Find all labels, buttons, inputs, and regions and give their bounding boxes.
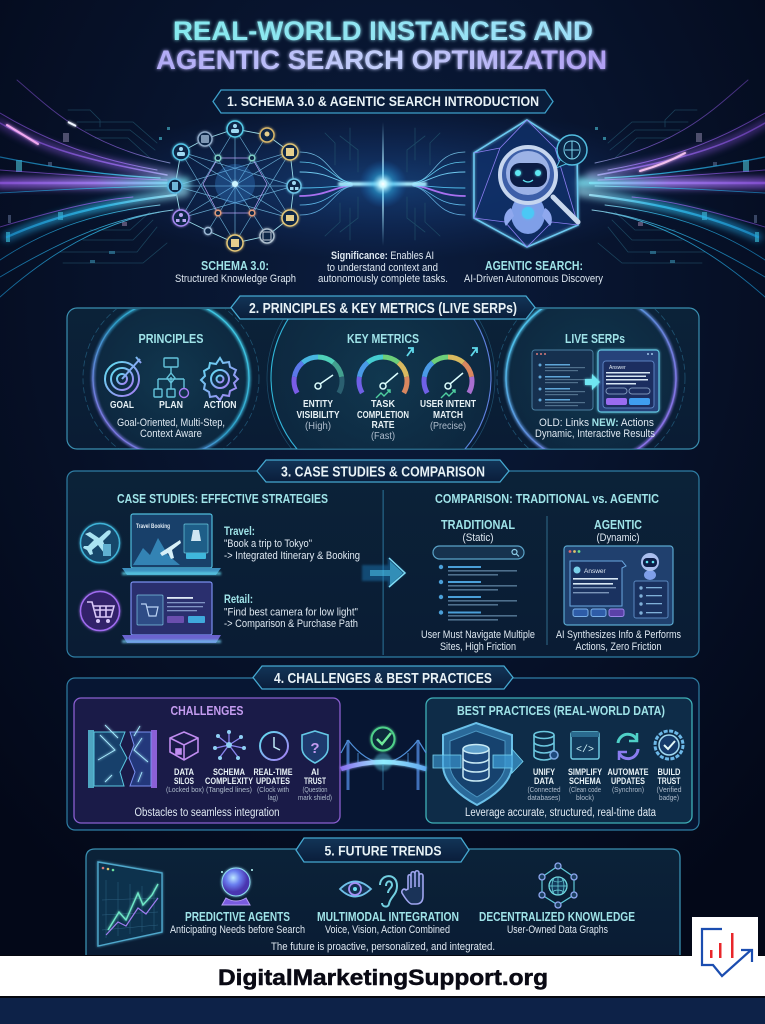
icon: data shield with arrow [433, 723, 523, 805]
best practice labels: databases) [528, 793, 561, 802]
text: decentralized knowledge: User-Owned Data Graphs [507, 924, 608, 936]
text: significance: autonomously complete tasks. [318, 273, 448, 285]
best practice labels: (Synchron) [612, 785, 644, 794]
gauge: task completion rate [359, 348, 413, 398]
traditional column: User Must Navigate Multiple [421, 629, 535, 641]
text: agentic search caption: AGENTIC SEARCH: [485, 259, 583, 273]
text: significance: Significance: Enables AI [331, 250, 434, 262]
section 4 heading pill [253, 666, 513, 689]
live serps column [532, 331, 659, 440]
challenge labels: COMPLEXITY [205, 776, 254, 787]
metric labels [296, 399, 476, 442]
metric labels: TASK [371, 399, 396, 410]
best practices box: Leverage accurate, structured, real-time data [465, 807, 656, 819]
text: significance [318, 250, 448, 285]
agentic column: Actions, Zero Friction [576, 641, 662, 653]
icon: travel booking laptop: Travel Booking [136, 524, 170, 530]
section 1 heading pill: 1. SCHEMA 3.0 & AGENTIC SEARCH INTRODUCTION [227, 94, 539, 109]
icon: unify database [534, 732, 558, 760]
challenges box: CHALLENGES [170, 703, 244, 718]
text: predictive agents [170, 909, 305, 936]
panel: case studies and comparison [67, 460, 699, 657]
best practice labels: (Clean code [569, 785, 601, 794]
section 1 heading pill [213, 90, 553, 113]
challenge labels: REAL-TIME [254, 767, 292, 778]
text: retail case: Retail: [224, 594, 253, 606]
best practice labels: UNIFY [533, 767, 556, 778]
agentic column: (Dynamic) [596, 532, 640, 544]
best practice labels: badge) [659, 793, 679, 802]
best practice labels: AUTOMATE [608, 767, 648, 778]
text: predictive agents: PREDICTIVE AGENTS [185, 909, 290, 924]
principles column: ACTION [204, 400, 236, 411]
icon: tangled schema nodes [213, 730, 246, 760]
best practices box: BEST PRACTICES (REAL-WORLD DATA) [457, 703, 665, 718]
principles column: Context Aware [140, 428, 202, 440]
section 2 heading pill: 2. PRINCIPLES & KEY METRICS (LIVE SERPs) [249, 300, 517, 317]
metric labels: MATCH [433, 410, 463, 421]
icon: goal target [105, 357, 141, 396]
result list [439, 565, 517, 621]
section 5 heading pill [296, 838, 469, 862]
text: multimodal integration [317, 909, 459, 936]
icon: trust badge [655, 731, 683, 759]
agentic column [556, 517, 681, 653]
challenge labels: AI [311, 767, 319, 778]
icon: bridge with check [341, 728, 426, 790]
icon: decentralized network globe [539, 863, 577, 908]
challenge labels: (Clock with [257, 785, 289, 794]
icon: retail cart circle [80, 592, 120, 630]
icon: question shield: ? [310, 740, 320, 757]
title [156, 16, 607, 75]
traditional column: Sites, High Friction [440, 641, 516, 653]
challenge labels: TRUST [304, 776, 326, 787]
icon: small robot [641, 553, 659, 580]
metric labels: RATE [372, 420, 395, 431]
text: multimodal integration: Voice, Vision, Action Combined [325, 924, 450, 936]
metric labels: VISIBILITY [296, 410, 340, 421]
arrow: case studies to comparison [362, 557, 406, 588]
gauge: entity visibility [294, 357, 342, 393]
best practice labels: TRUST [658, 776, 681, 787]
best practice labels: (Verified [656, 785, 682, 794]
challenges box: Obstacles to seamless integration [134, 807, 280, 819]
traditional column [421, 517, 535, 653]
text: decentralized knowledge: DECENTRALIZED KNOWLEDGE [479, 909, 635, 924]
principles column: PRINCIPLES [138, 331, 204, 346]
best practice labels: (Connected [528, 785, 560, 794]
text: decentralized knowledge [479, 909, 635, 936]
metric labels: (Fast) [371, 431, 395, 442]
icon: knowledge graph network [168, 121, 301, 251]
icon: question shield [302, 731, 328, 763]
metric labels: (Precise) [430, 421, 466, 432]
icon: action gear [201, 358, 238, 400]
live serps column: LIVE SERPs [565, 331, 625, 346]
traditional column: (Static) [462, 532, 494, 544]
text: significance: to understand context and [327, 262, 438, 274]
icon: crystal ball [221, 868, 253, 905]
text: retail case: "Find best camera for low light" [224, 606, 358, 618]
icon: travel booking laptop [122, 514, 221, 575]
comparison heading: COMPARISON: TRADITIONAL vs. AGENTIC [435, 491, 660, 506]
principles column: Goal-Oriented, Multi-Step, [117, 417, 225, 429]
section 3 heading pill [257, 460, 509, 482]
agentic answer window: Answer [584, 568, 607, 575]
principles column: GOAL [110, 400, 134, 411]
arrow: old to new [585, 374, 600, 390]
panel: challenges and best practices [67, 666, 699, 830]
challenge labels: lag) [268, 793, 278, 802]
text: schema 3.0 caption: SCHEMA 3.0: [201, 259, 269, 273]
agentic column: AGENTIC [594, 517, 643, 532]
traditional column: TRADITIONAL [441, 517, 515, 532]
challenge labels: (Tangled lines) [206, 785, 252, 794]
challenge labels: (Question [302, 785, 328, 794]
best practices box [426, 698, 692, 823]
icon: code block: </> [576, 744, 594, 756]
metric labels: (High) [305, 421, 331, 432]
challenge labels: SCHEMA [213, 767, 245, 778]
best practice labels: SCHEMA [569, 776, 601, 787]
title: REAL-WORLD INSTANCES AND [173, 16, 593, 46]
icon: broken wall [88, 725, 157, 788]
icon: sync arrows [618, 733, 638, 760]
challenge labels: mark shield) [298, 793, 332, 802]
title: AGENTIC SEARCH OPTIMIZATION [156, 45, 607, 75]
metric labels: ENTITY [303, 399, 333, 410]
metric labels: COMPLETION [357, 410, 409, 421]
text: multimodal integration: MULTIMODAL INTEGRATION [317, 909, 459, 924]
best practice labels: UPDATES [611, 776, 645, 787]
key metrics column [294, 331, 477, 442]
section 4 heading pill: 4. CHALLENGES & BEST PRACTICES [274, 671, 492, 687]
section 3 heading pill: 3. CASE STUDIES & COMPARISON [281, 464, 485, 480]
logo [692, 917, 758, 976]
challenge labels: DATA [174, 767, 194, 778]
metric labels: USER INTENT [420, 399, 476, 410]
challenge labels: UPDATES [256, 776, 290, 787]
best practice labels: BUILD [658, 767, 681, 778]
background energy streams [0, 80, 765, 297]
best practice labels: DATA [534, 776, 554, 787]
text: agentic search caption [464, 259, 603, 285]
footer banner: DigitalMarketingSupport.org [218, 965, 548, 990]
principles column: PLAN [159, 400, 183, 411]
panel: future trends [86, 838, 680, 956]
gauge: user intent match [424, 348, 477, 398]
text: schema 3.0 caption: Structured Knowledge Graph [175, 273, 296, 285]
icon: plan flowchart [154, 358, 188, 398]
live serps column: Dynamic, Interactive Results [535, 428, 655, 440]
text: retail case: -> Comparison & Purchase Path [224, 618, 358, 630]
challenges box [74, 698, 340, 823]
best practice labels [528, 767, 682, 802]
case studies heading: CASE STUDIES: EFFECTIVE STRATEGIES [117, 491, 328, 506]
icon: locked box [170, 732, 198, 760]
text: retail case [224, 594, 358, 630]
icon: eye [340, 882, 371, 896]
section 2 heading pill [231, 296, 535, 319]
section 5 heading pill: 5. FUTURE TRENDS [324, 842, 442, 858]
icon: ear [380, 876, 397, 907]
agentic column: AI Synthesizes Info & Performs [556, 629, 681, 641]
text: agentic search caption: AI-Driven Autonomous Discovery [464, 273, 603, 285]
icon: code block [571, 732, 599, 759]
footer background [0, 997, 765, 1024]
text: predictive agents: Anticipating Needs before Search [170, 924, 305, 936]
principles column [105, 331, 238, 440]
icon: hand [402, 871, 423, 904]
footer banner [0, 955, 765, 998]
search bar [433, 546, 524, 559]
panel: principles and key metrics [66, 295, 700, 450]
icon: clock [260, 732, 288, 760]
text: schema 3.0 caption [175, 259, 296, 285]
best practice labels: SIMPLIFY [568, 767, 603, 778]
icon: travel plane circle [80, 524, 120, 562]
text: travel case: -> Integrated Itinerary & Booking [224, 550, 360, 562]
challenge labels [166, 767, 332, 802]
challenge labels: (Locked box) [166, 785, 204, 794]
text: travel case: "Book a trip to Tokyo" [224, 538, 312, 550]
icon: growth chart window [98, 862, 162, 946]
new serp window: Answer [609, 365, 626, 371]
challenge labels: SILOS [174, 776, 194, 787]
text: travel case [224, 526, 360, 562]
key metrics column: KEY METRICS [347, 331, 419, 346]
text: closing statement: The future is proactive, personalized, and integrated. [271, 941, 495, 953]
live serps column: OLD: Links NEW: Actions [539, 417, 654, 429]
text: travel case: Travel: [224, 526, 255, 538]
best practice labels: block) [576, 793, 594, 802]
icon: agentic search robot with magnifier [474, 120, 587, 247]
old serp window [532, 350, 593, 410]
icon: retail laptop [122, 582, 221, 643]
